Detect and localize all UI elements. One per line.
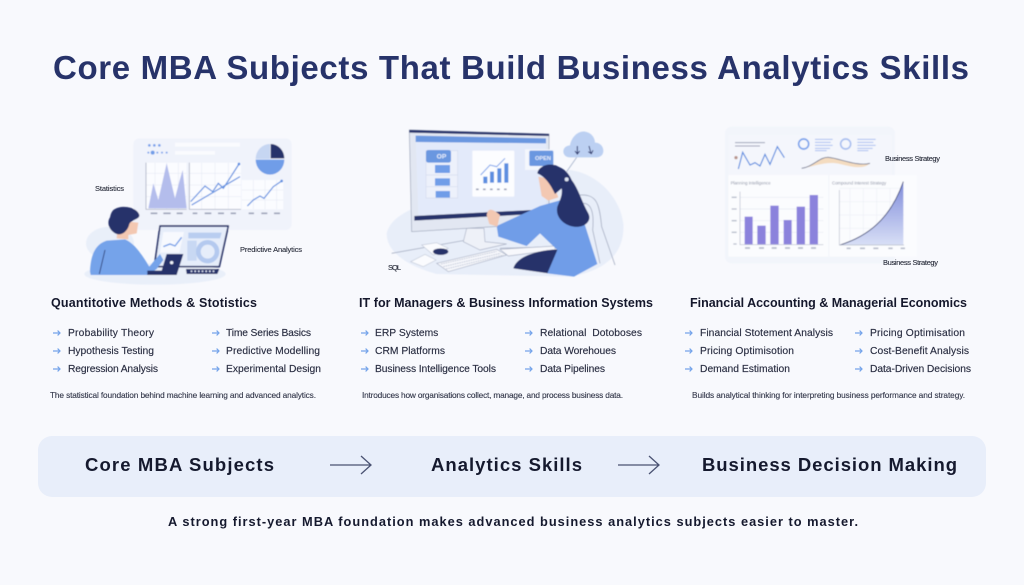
topic list: Pricing Optimisation [870,328,965,339]
label: Predictive Analytics: Predictive Analytics [240,245,302,254]
label: Statistics: Statistics [95,184,124,193]
bar chart panel [728,175,828,257]
small line chart [242,180,283,213]
sidebar menu: OP [437,154,447,161]
topic list [685,328,971,375]
topic list: Experimental Design [226,364,321,375]
heading: Financial Accounting & Managerial Economics [690,296,967,310]
OPEN card: OPEN [535,156,551,162]
panel: financial accounting and managerial economics [685,127,971,400]
growth curve panel [829,175,917,257]
cloud icon [563,132,603,172]
description: The statistical foundation behind machine learning and advanced analytics. [50,390,316,400]
topic list: Financial Stotement Analysis [700,328,833,339]
topic list [53,328,321,375]
topic list: Hypothesis Testing [68,346,154,357]
step: Analytics Skills: Analytics Skills [431,454,582,475]
desk items [392,240,557,272]
topic list: Business Intelligence Tools [375,364,496,375]
illustration: analyst with charts and laptop [84,138,292,285]
step: Business Decision Making: Business Decision Making [702,454,957,475]
description: Builds analytical thinking for interpreting business performance and strategy. [692,390,965,400]
heading: IT for Managers & Business Information Systems [359,296,653,310]
topic list: CRM Platforms [375,346,445,357]
topic list: Data Pipelines [540,364,605,375]
background blob [387,170,623,277]
area chart [146,163,187,213]
topic list: Probability Theory [68,328,155,339]
label: SQL: SQL [388,263,401,272]
topic list: Pricing Optimisotion [700,346,794,357]
label: Business Strategy lower: Business Strategy [883,258,938,267]
step: Core MBA Subjects: Core MBA Subjects [85,454,274,475]
arrow [330,456,371,474]
illustration: woman at desktop computer [387,130,623,277]
topic list: Time Series Basics [226,328,311,339]
panel: IT for managers and business information systems [359,130,653,400]
arrow [618,456,659,474]
illustration: dashboards [725,127,917,263]
panel: quantitative methods and statistics [50,138,321,400]
label: Business Strategy upper: Business Strategy [885,154,940,163]
person at laptop [90,207,163,275]
topic list [361,328,642,375]
title: Core MBA Subjects That Build Business Analytics Skills [53,49,969,86]
desktop monitor [409,130,554,250]
topic list: Demand Estimation [700,364,790,375]
line chart [189,163,241,213]
OPEN card [525,149,554,170]
topic list: Data-Driven Decisions [870,364,971,375]
sidebar menu [426,150,458,198]
monitor [154,226,228,267]
topic list: Data Worehoues [540,346,616,357]
topic list: ERP Systems [375,328,438,339]
flow band [38,436,986,497]
topic list: Relational Dotoboses [540,328,642,339]
pie chart [256,144,284,175]
heading: Quantitotive Methods & Stotistics [51,296,257,310]
chair [580,195,615,265]
topic list: Predictive Modelling [226,346,320,357]
closing statement: A strong first-year MBA foundation makes advanced business analytics subjects easier to master. [168,514,858,529]
growth curve panel: Compound Interest Strategy [832,180,887,185]
bar chart panel: Planning Intelligence [731,181,771,186]
topic list: Cost-Benefit Analysis [870,346,969,357]
top dashboard [728,135,892,175]
laptop [147,254,183,275]
woman [487,165,597,277]
topic list: Regression Analysis [68,364,158,375]
bar chart card [472,151,514,197]
description: Introduces how organisations collect, manage, and process business data. [362,390,623,400]
keyboard [186,269,219,274]
